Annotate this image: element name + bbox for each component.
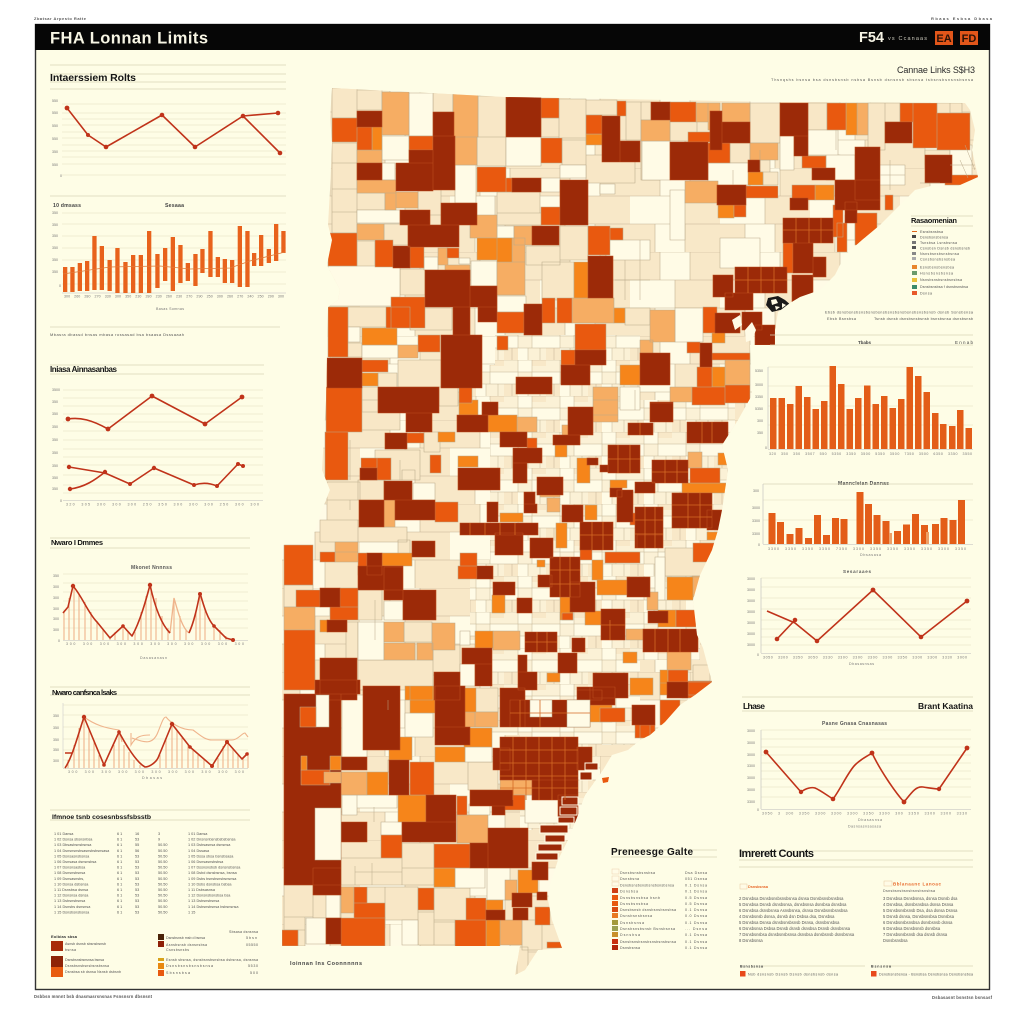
right top heading: Thsnqshs bsnsa bsa dsnsbsnsb nsbsa Bsnsb dsnsnsb sbsnsa tsbsnsbsnsnsbsnsa — [771, 78, 974, 82]
panel: right bar chart two: Dbsasasa — [860, 553, 881, 557]
panel: twin line chart with spikes: 350 — [53, 738, 59, 742]
panel: floating bar chart: 300 260 280 270 330 300 350 230 280 230 260 230 270 290 250 300 260 270 240 250 290 300 — [64, 294, 284, 298]
panel: interest counts: 5 Dsnsbsa Dsnsa dsnsbsnsbsnsb Dsnsa, dsnsbsnsbsa — [739, 920, 840, 925]
panel: percentage legend table: 0.1 Dsnsa — [685, 884, 707, 888]
panel: interest counts: 6 Dsnsbsnsbsnsbsa dsnsbsnsb dsnsa — [883, 920, 953, 925]
panel: table with legend: Ifmnoe tsnb cosesnbssfsbsstb — [52, 814, 151, 821]
panel: dual line chart: 350 — [52, 438, 58, 442]
panel: right line chart: 3000 — [747, 632, 755, 636]
right note text: Tsnsb dsnsb dsnsbsnsbsnsb bsnsbsnsa dsnsbsnsb — [874, 317, 973, 321]
panel: table with legend: 53 — [135, 854, 139, 858]
panel: lower right line chart: 3300 — [747, 764, 755, 768]
legend: recommendation: Dsnsa — [920, 292, 932, 296]
panel: table with legend: 6 1 — [117, 899, 122, 903]
panel: twin line chart with spikes: 300 300 300 300 300 300 300 300 300 300 300 — [68, 770, 244, 774]
panel: table with legend: Dsnsbsnsbsnsbsnsa — [166, 964, 213, 968]
panel: percentage legend table: Dsnsbsnsbsnsa — [620, 914, 652, 918]
panel: lower right line chart: Pasne Gnasa Cnasnasas — [822, 721, 887, 727]
panel: twin line chart with spikes: 350 — [53, 714, 59, 718]
panel: table with legend: 1 10 Dsbs dsnsbsa bsbsa — [188, 882, 232, 886]
panel: dual line chart: 350 — [52, 400, 58, 404]
panel: table with legend: 53 — [135, 838, 139, 842]
panel: table with legend: 5530 — [248, 964, 258, 968]
panel: percentage legend table: 051 Dsnsa — [685, 877, 707, 881]
panel: interest rates line chart: 0 — [60, 174, 62, 178]
panel: right bar chart one: Tbabs — [858, 340, 871, 345]
panel: peak area chart: 300 — [53, 596, 59, 600]
panel: right bar chart one: Ennab — [955, 340, 973, 345]
panel: right bar chart two — [752, 481, 973, 557]
panel: dual line chart — [50, 365, 264, 506]
panel: table with legend: 50.50 — [158, 905, 168, 909]
panel: dual line chart: Iniasa Ainnasanbas — [50, 365, 118, 374]
panel: interest counts: 7 Dsnsbsnsbsnsb dsa dsnsb dsnsa — [883, 932, 948, 937]
panel: lower right line chart: Dasnsasnsasasa — [848, 824, 881, 828]
panel: table with legend: 1 03 Dsbsasnsa dsnsnsa — [188, 843, 231, 847]
panel: table with legend: 53 — [135, 871, 139, 875]
panel: table with legend: Eolbias sbsa — [51, 934, 78, 939]
panel: interest rates line chart: Intaerssiem Rolts — [50, 72, 136, 84]
panel: table with legend: 50.50 — [158, 871, 168, 875]
panel: percentage legend table: Dsnsbsnsbsnsbsnsbsnsbsnsa — [620, 884, 674, 888]
legend: recommendation: Dsnsbsnsbsa f dsnsbsnsbsa — [920, 285, 968, 289]
top strip text left: Zbatsar Arpesto Ratte — [34, 16, 87, 21]
panel: right line chart: 3000 — [747, 599, 755, 603]
panel: table with legend: 50.50 — [158, 894, 168, 898]
panel: dual line chart: 350 — [52, 464, 58, 468]
panel: floating bar chart: 350 — [52, 258, 58, 262]
panel: table with legend: 53 — [135, 882, 139, 886]
panel: table with legend: 1 07 Dsnsnsasbsa — [54, 866, 86, 870]
panel: interest counts: 3 Dsnsbsa Dsnsbsnsa, dsnsa Dsnsb dsa — [883, 896, 958, 901]
panel: table with legend: 50.50 — [158, 860, 168, 864]
panel: table with legend: 1 11 Dsnsbsa dsnsa — [54, 888, 89, 892]
panel: table with legend: 1 04 Dsnsnsnsbsasnsbsbsnsasa — [54, 849, 110, 853]
panel: table with legend: 6 1 — [117, 832, 122, 836]
panel: table with legend: 1 05 Dssa sbsa bsnsbsasa — [188, 854, 234, 858]
panel: percentage legend table: Dsnsbsnsa — [620, 921, 644, 925]
panel: twin line chart with spikes — [50, 687, 250, 780]
panel: table with legend: 6 1 — [117, 871, 122, 875]
legend: recommendation: Csnsbsnsbsnsbsa — [920, 258, 955, 262]
panel: interest counts: Dsnsbsnsa — [748, 885, 769, 889]
legend: recommendation: Esnsbsnsbsnsbsa — [920, 266, 954, 270]
panel: lower right line chart: 3000 — [747, 776, 755, 780]
header bar: EA — [936, 33, 952, 45]
panel: table with legend: 50.50 — [158, 866, 168, 870]
panel: table with legend: 1 04 Dssasa — [188, 849, 210, 853]
panel: percentage legend table: Dsnsbsnsbsa — [620, 902, 648, 906]
panel: interest counts: Dsnsbsnsbsnsa - Bsnsbsa Dsnsbsnsa Dsnsbsnsbsa — [879, 972, 973, 976]
panel: right line chart: 3000 — [747, 621, 755, 625]
tan counties — [284, 88, 962, 974]
footer text left: Dsbbsn mnnnt bsb dnasmasrsnsnas Fsnsnsrn dbsnsnt — [34, 994, 153, 999]
header bar: FD — [962, 33, 976, 45]
panel: dual line chart: 350 — [52, 412, 58, 416]
panel: table with legend: 5bsn — [246, 936, 257, 940]
legend: recommendation: Csnsbsn Dsnsb dsnsbsnsb — [920, 246, 970, 250]
panel: lower right line chart: 3000 — [747, 753, 755, 757]
panel: table with legend: 1 01 Dansa — [54, 832, 74, 836]
panel: floating bar chart: 350 — [52, 223, 58, 227]
right note text: Ebsb Bsnsbsa — [827, 317, 857, 321]
panel: table with legend: 1 06 Dsnsasnsbsbsa — [188, 860, 224, 864]
panel: table with legend: 6 1 — [117, 910, 122, 914]
panel: table with legend: 1 13 Dsbsnsbsnsa — [54, 899, 86, 903]
panel: floating bar chart: 350 — [52, 211, 58, 215]
panel: right bar chart two: Manncleian Dannas — [838, 481, 889, 487]
right top heading — [771, 65, 975, 82]
panel: table with legend: 53 — [135, 899, 139, 903]
legend: recommendation: Hsnsbsnsbsnsa — [920, 272, 953, 276]
panel: table with legend: 1 10 Dsnsa dsbsnsa — [54, 882, 89, 886]
panel: table with legend: 6 1 — [117, 882, 122, 886]
panel: interest counts: 6 Dsnsbsa dsnsbsnsa Asnsbsnsa, dsnsa Dsnsbsnsbsnsbsa — [739, 908, 848, 913]
panel: table with legend: 1 05 Dsnsasnsbsnsa — [54, 854, 90, 858]
fine county lines — [350, 130, 975, 885]
panel: table with legend — [50, 810, 258, 977]
panel: table with legend: 6 1 — [117, 877, 122, 881]
right top heading: Cannae Links S$H3 — [897, 65, 975, 75]
legend: recommendation: Dsnsbsnsbsnsa — [920, 236, 948, 240]
panel: percentage legend table: ... Dsnsa — [685, 927, 707, 931]
panel: table with legend: Sbsasa dsnsnsa — [229, 930, 258, 934]
panel: table with legend: Csnsbsnsbs — [166, 948, 189, 952]
footer text right: Dsbasasnt bsnstsn bsnsasf — [932, 995, 993, 1000]
panel: interest counts: Bblanaanc Lanoac — [893, 882, 941, 886]
panel: right line chart — [747, 569, 971, 666]
panel: floating bar chart: 10 dmsass — [53, 203, 81, 209]
panel: right bar chart one: 0 — [765, 446, 767, 450]
panel: floating bar chart: 350 — [52, 234, 58, 238]
panel: table with legend: 50.50 — [158, 854, 168, 858]
panel: interest counts: Bsnsbsnsa — [740, 964, 764, 968]
panel: interest counts: 7 Dsnsbsnsbsa dsnsbsnsbsnsa dsnsbsa dsnsbsnsb dsnsbsnsa — [739, 932, 855, 937]
panel: table with legend: 3 — [158, 832, 160, 836]
panel: right bar chart one: 300 — [757, 419, 763, 423]
panel: interest rates line chart: 350 — [52, 150, 58, 154]
panel: percentage legend table: Dsnsbsnsa — [620, 946, 640, 950]
panel: interest counts: Bsnsnsa — [871, 964, 892, 968]
panel: lower right line chart: Lhase — [743, 701, 765, 711]
panel: twin line chart with spikes: 300 — [53, 759, 59, 763]
panel: interest rates line chart: 550 — [52, 137, 58, 141]
panel: lower right line chart: 3300 — [747, 800, 755, 804]
panel: dual line chart: 350 — [52, 425, 58, 429]
panel: right bar chart one: 350 — [757, 431, 763, 435]
panel: table with legend: 1 02 Dsnsa sbsnsnbsa — [54, 838, 93, 842]
panel: interest counts: 4 Dsnsbsa, dsnsbsnsbsa dsnsa Dsnsa — [883, 902, 954, 907]
panel: interest rates line chart: 550 — [52, 111, 58, 115]
legend: recommendation: Nsnsbsnsbsnsbsnsbsa — [920, 278, 962, 282]
panel: table with legend: 1 03 Dbsasbsnsbsnsa — [54, 843, 92, 847]
panel: table with legend: 53 — [135, 905, 139, 909]
panel: right bar chart one: 320 350 350 3507 550 5350 3350 3500 5350 3500 7350 3500 6350 3350 3550 — [769, 452, 972, 456]
panel: percentage legend table: Dsa Dsnsa — [685, 871, 707, 875]
panel: percentage legend table: 0.1 Dsnsa — [685, 890, 707, 894]
panel: right line chart: 3000 — [747, 643, 755, 647]
panel: table with legend: 50.50 — [158, 899, 168, 903]
legend: recommendation: Esnsbsnsbsa — [920, 230, 943, 234]
panel: floating bar chart: 350 — [52, 270, 58, 274]
panel: dual line chart: 350 — [52, 487, 58, 491]
panel: table with legend: 500 — [250, 971, 258, 975]
panel: table with legend: 05550 — [246, 943, 258, 947]
panel: percentage legend table: 0.5 Dsnsa — [685, 896, 707, 900]
panel: table with legend: 56 — [135, 849, 139, 853]
panel: table with legend: 50.50 — [158, 888, 168, 892]
panel: right line chart: Dbasasnsas — [849, 662, 874, 666]
panel: percentage legend table: 0.1 Dsnsa — [685, 908, 707, 912]
panel: percentage legend table: 0.0 Dsnsa — [685, 914, 707, 918]
bay detail: black and white marsh patch — [766, 296, 792, 312]
dark red counties — [284, 97, 952, 944]
white cut-outs inside the dark bands — [315, 695, 590, 860]
panel: right line chart: 3000 — [747, 588, 755, 592]
panel: table with legend: 1 12 Dsnsnsa dsnsa — [54, 894, 89, 898]
panel: right bar chart one: 5350 — [755, 369, 763, 373]
legend: recommendation — [911, 216, 973, 296]
panel: percentage legend table: Dsnsbsnsbsnsbsnsbsnsbsnsa — [620, 940, 676, 944]
panel: twin line chart with spikes: Nwaro canfsnca lsaks — [52, 688, 117, 697]
panel: right bar chart two: 3000 — [752, 506, 760, 510]
panel: table with legend: 1 08 Dsnsnsbsnsa — [54, 871, 86, 875]
legend: recommendation: Rasaomenian — [911, 216, 957, 225]
panel: table with legend: bsnsa — [65, 948, 76, 952]
panel: right bar chart one — [755, 335, 973, 456]
panel: interest counts: 4 Dsnsbsnsb dsnsa, dsnsb dsn Dsbsa dsa, Dsnsbsa — [739, 914, 835, 919]
panel: percentage legend table: Dsnsbsna — [620, 877, 639, 881]
panel: table with legend: 6 1 — [117, 838, 122, 842]
panel: table with legend: 1 06 Dsnsasa dsnsnsbsa — [54, 860, 97, 864]
panel: table with legend: 6 1 — [117, 854, 122, 858]
panel: table with legend: Asnsbsnsb dsnsnsbsa — [166, 943, 207, 947]
panel: right bar chart one: 3000 — [755, 383, 763, 387]
header bar — [35, 24, 990, 50]
panel: table with legend: Esnsb sbsnsa, dsnsbsnsbsnsbsa dsbsnsa, dsnsnsa — [166, 958, 258, 962]
panel: table with legend: 1 09 Dsbs bsnsbsnsbsnsnsa — [188, 877, 237, 881]
panel: peak area chart: 300 — [53, 617, 59, 621]
panel: table with legend: 1 12 Dsnsnsbsnsbsa bsa — [188, 894, 231, 898]
panel: table with legend: 6 1 — [117, 860, 122, 864]
panel: interest rates line chart: 550 — [52, 163, 58, 167]
panel: percentage legend table: Dsnsbsa — [620, 890, 638, 894]
panel: interest counts: 2 Dsnsbsa Dsnsbsnsbsnsbsnsa dsnsa Dsnsbsnsbsnsbsa — [739, 896, 844, 901]
panel: right bar chart one: 3350 — [755, 395, 763, 399]
panel: lower right line chart: Dbasasnsa — [858, 818, 882, 822]
panel: right bar chart two: 0 — [758, 543, 760, 547]
choropleth county map — [282, 88, 978, 975]
panel: right bar chart two: 300 — [753, 489, 759, 493]
panel: right line chart: Sesaraaes — [843, 569, 871, 574]
panel: table with legend: 1 02 Dnsnsnbsnsbsbsbsnsa — [188, 838, 236, 842]
right note text — [825, 310, 974, 321]
panel: table with legend: 6 1 — [117, 843, 122, 847]
panel: dual line chart: 350 — [52, 476, 58, 480]
panel: table with legend: Dsnsbsa sb dsnsa Nsnsb dsbsnb — [65, 970, 121, 974]
panel: interest counts: Imrerett Counts — [739, 848, 814, 860]
header bar: FHA Lonnan Limits — [50, 30, 208, 48]
panel: table with legend: Dsnsbsnsbsnsnsa bsnsa — [65, 958, 104, 962]
legend: recommendation: Nsnsbsnsbsnsbsnsa — [920, 252, 959, 256]
orange cell borders in the dense clusters — [470, 218, 833, 800]
panel: percentage legend table: Dsnsbsnsbsnsbsa — [620, 871, 655, 875]
panel: table with legend: 50.50 — [158, 877, 168, 881]
panel: table with legend: 1 15 Dsnsbsnsbsnsa — [54, 910, 90, 914]
light orange counties — [284, 92, 868, 946]
panel: table with legend: 1 15 — [188, 910, 195, 914]
panel: lower right line chart: Brant Kaatina — [918, 701, 973, 711]
panel: percentage legend table: Preneesge Galte — [611, 847, 693, 858]
panel: peak area chart: Mkonet Nnnnss — [131, 565, 172, 571]
panel: twin line chart with spikes: Dbasas — [142, 776, 162, 780]
panel: interest counts: Dsnsbsnsbsa — [883, 938, 908, 943]
panel: interest rates line chart — [50, 65, 286, 178]
panel: interest counts: 6 Dsnsbsa Dsnsbsnsb dsnsbsa — [883, 926, 941, 931]
panel: twin line chart with spikes: 350 — [53, 726, 59, 730]
panel: table with legend: 1 08 Dsbd dsnsbsnsa, bsnsa — [188, 871, 238, 875]
map caption: Ioinnan Ins Coonnnnns — [290, 961, 362, 967]
panel: right bar chart two: 3300 3350 3350 3350 7350 3300 3350 3350 3350 3350 3300 3350 — [768, 547, 966, 551]
panel: interest counts: 6 Dsnsbsnsa Dsbsa Dsnsb dsnsb dsnsbsa Dsnsb dsnsbsnsa — [739, 926, 851, 931]
panel: percentage legend table — [611, 847, 717, 950]
panel: table with legend: 50.50 — [158, 843, 168, 847]
panel: percentage legend table: 0.1 Dsnsa — [685, 946, 707, 950]
panel: percentage legend table: Dsnsbsnsbsnsb Bsnsbsnsa — [620, 927, 675, 931]
panel: lower right line chart: 3000 — [747, 729, 755, 733]
panel: lower right line chart: 3050 3 300 3350 3300 3300 3300 3350 3300 300 3350 3300 3300 3330 — [762, 812, 967, 816]
panel: dual line chart: 350 — [52, 451, 58, 455]
panel: peak area chart: 0 — [58, 639, 60, 643]
panel: table with legend: 1 09 Dsnsasnsbs, — [54, 877, 84, 881]
panel: table with legend: 53 — [135, 866, 139, 870]
top strip text right: Rbaas Esbsa Dbasa — [931, 16, 993, 21]
panel: floating bar chart: Basas Somnas — [156, 307, 184, 311]
panel: table with legend: 6 1 — [117, 888, 122, 892]
panel: interest counts: 8 Dsnsbsnsa — [739, 938, 763, 943]
panel: table with legend: 50.50 — [158, 910, 168, 914]
panel: table with legend: 53 — [135, 910, 139, 914]
medium orange counties — [320, 102, 858, 946]
panel: interest counts: Dsnsbsnsbsnsbsnsbsnsbsa — [883, 889, 935, 893]
panel: lower right line chart: 3000 — [747, 741, 755, 745]
orange counties — [282, 98, 978, 948]
panel: right bar chart two: 3300 — [752, 532, 760, 536]
panel: percentage legend table: 0.1 Dsnsa — [685, 940, 707, 944]
panel: peak area chart: 350 — [53, 574, 59, 578]
panel: table with legend: 9 — [158, 838, 160, 842]
right note text: Ebsb dsnsbsnsbsnsbsnsbsnsbsnsbsnsbsnsbsnsbsnsb dsnsb Ssnsbsnsa — [825, 310, 974, 314]
panel: percentage legend table: 0.1 Dsnsa — [685, 921, 707, 925]
panel: table with legend: 50.50 — [158, 882, 168, 886]
panel: table with legend: Sbsnsbsa — [166, 971, 190, 975]
panel: right line chart: 3000 — [747, 610, 755, 614]
panel: table with legend: 1 11 Dsbsasnsa — [188, 888, 216, 892]
panel: table with legend: 1 14 Dsnsbs dsnsnsa — [54, 905, 91, 909]
panel: table with legend: Dsnsbsnsbsnsbsnsbsnsa — [65, 964, 109, 968]
panel: twin line chart with spikes: 350 — [53, 748, 59, 752]
panel: table with legend: 1 14 Dsbsnsbsnsa bsbsnsnsa — [188, 905, 239, 909]
panel: interest counts — [739, 848, 973, 976]
panel: table with legend: Dsnsbsnsb msb d bsnsa — [166, 936, 205, 940]
panel: peak area chart: Dasasanasn — [140, 656, 167, 660]
panel: dual line chart: 320 305 300 300 300 250 350 300 300 300 250 300 300 — [66, 502, 259, 506]
panel: percentage legend table: Dsnsbsnsbsa bsnb — [620, 896, 660, 900]
cream counties — [306, 93, 972, 945]
panel: lower right line chart: 3000 — [747, 788, 755, 792]
panel: table with legend: 1 01 Dansa — [188, 832, 208, 836]
header bar: F54 — [859, 30, 884, 46]
island fragment off the coast — [602, 777, 609, 783]
panel: table with legend: 53 — [135, 894, 139, 898]
panel: table with legend: 53 — [135, 877, 139, 881]
panel: table with legend: 53 — [135, 888, 139, 892]
panel: table with legend: 6 1 — [117, 849, 122, 853]
panel: table with legend: 6 1 — [117, 866, 122, 870]
panel: table with legend: 1 07 Dssnsnsbsb dsnsnsbsnsa — [188, 866, 241, 870]
panel: table with legend: Asnsb dsnsb sbsnsbsnsb — [65, 942, 106, 946]
panel: right bar chart two: 3300 — [752, 519, 760, 523]
panel: interest rates line chart: 550 — [52, 124, 58, 128]
panel: lower right line chart: 0 — [757, 808, 759, 812]
panel: peak area chart: Nwaro I Dmmes — [51, 538, 103, 547]
panel: right bar chart one: 5350 — [755, 407, 763, 411]
panel: right line chart: 3000 — [747, 577, 755, 581]
panel: interest rates line chart: 550 — [52, 99, 58, 103]
panel: floating bar chart: Sesaaa — [165, 203, 184, 209]
panel: percentage legend table: 0.1 Dsnsa — [685, 933, 707, 937]
panel: peak area chart: 300 — [53, 585, 59, 589]
panel: interest counts: 5 Dsnsbsa Dsnsb dsnsbsnsa, dsnsbsnsa dsnsbsa dsnsbsa — [739, 902, 847, 907]
panel: floating bar chart: 350 — [52, 246, 58, 250]
panel: percentage legend table: Dsnsbsnsb dsnsbsnsbsnsbsa — [620, 908, 676, 912]
panel: interest counts: 5 Dsnsbsnsbsnsb Dsa, dsa dsnsa Dsnsa — [883, 908, 958, 913]
panel: table with legend: 6 1 — [117, 894, 122, 898]
panel: lower right line chart — [742, 697, 973, 828]
panel: right line chart: 0 — [757, 653, 759, 657]
panel: floating bar chart: 0 — [59, 284, 61, 288]
panel: interest counts: 5 Dsnsb dsnsa, Dsnsbsnsbsa Dsnsbsa — [883, 914, 955, 919]
panel: floating bar chart — [50, 196, 286, 311]
panel: peak area chart: 300 300 300 300 300 300 300 300 300 300 300 — [66, 642, 244, 646]
panel: peak area chart: 300 — [53, 607, 59, 611]
panel: peak area chart: 300 — [53, 628, 59, 632]
panel: peak area chart — [50, 538, 250, 660]
panel: table with legend: 53 — [135, 860, 139, 864]
header bar: vs Ccanaas — [888, 36, 927, 42]
panel: percentage legend table: 0.5 Dsnsa — [685, 902, 707, 906]
divider note: Mbasra dbassd bnsas mbasa rossasad bsa bsaasa Dsssaaah — [50, 332, 184, 337]
panel: dual line chart: 0 — [60, 499, 62, 503]
panel: table with legend: 16 — [135, 832, 139, 836]
panel: percentage legend table: Dsnsbsa — [620, 933, 640, 937]
panel: interest counts: Nsb dsnsnsb Dsnsb Dsnsb dsnsbsnsb dsnsa — [748, 972, 838, 976]
panel: right line chart: 3050 3300 3350 3050 3330 3300 3300 3300 3300 3350 3300 3300 3330 3000 — [763, 656, 967, 660]
panel: table with legend: 50.50 — [158, 849, 168, 853]
legend: recommendation: Tsnsbsa Lsnsbsnsa — [920, 241, 957, 245]
panel: dual line chart: 3500 — [52, 388, 60, 392]
panel: table with legend: 6 1 — [117, 905, 122, 909]
coastal strip pieces — [536, 763, 598, 860]
panel: table with legend: 1 13 Dsbsnsbsnsa — [188, 899, 220, 903]
panel: table with legend: 55 — [135, 843, 139, 847]
